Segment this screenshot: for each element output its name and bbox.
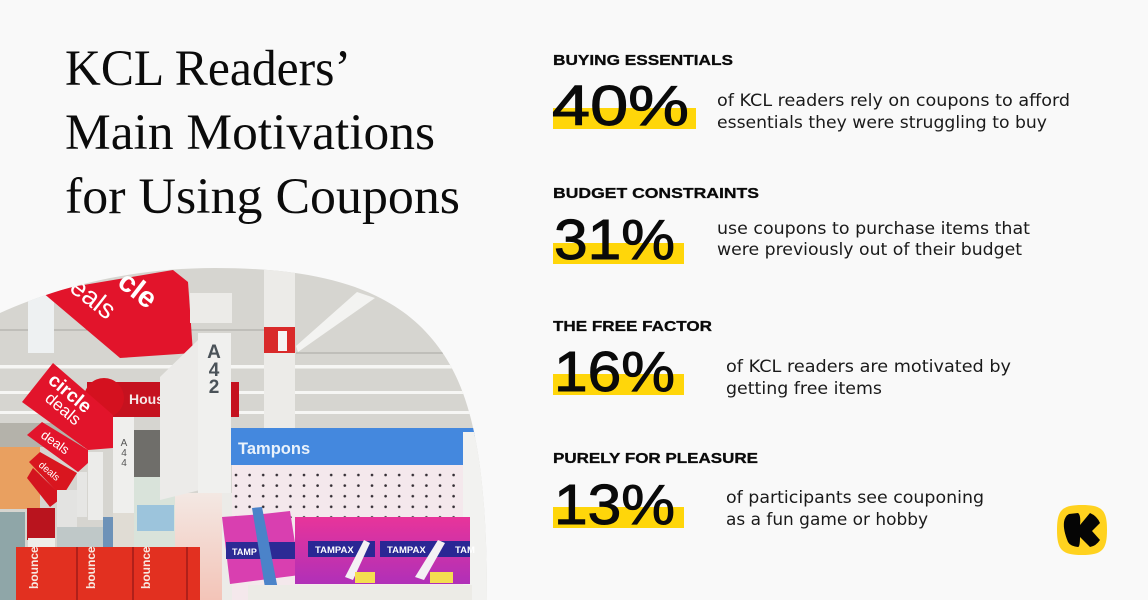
stat: buying essentials (552, 52, 1070, 138)
aisle markers: A (121, 438, 128, 449)
highlight bar (553, 108, 696, 129)
bounce boxes: bounce (84, 546, 98, 589)
number: 40% (552, 74, 689, 138)
icon: K logo (1057, 505, 1107, 555)
stat: budget constraints (553, 185, 1031, 272)
stacked diagonal deals signs (22, 363, 113, 507)
A42 sign: 4 (209, 360, 220, 381)
A42 sign: 2 (209, 377, 219, 398)
stacked diagonal deals signs: deals (38, 427, 73, 458)
stacked diagonal deals signs: deals (36, 460, 61, 484)
number: 16% (554, 340, 675, 404)
ceiling lights and tiles (0, 292, 490, 477)
detergent shelf (0, 477, 175, 600)
red banner: housewares (84, 378, 239, 418)
highlight bar (553, 374, 684, 395)
red hanging sign: circle deals: cle (112, 265, 163, 315)
highlight bar (553, 243, 684, 264)
stat: buying essentials: essentials they were struggling to buy (717, 113, 1047, 132)
heading: BUYING ESSENTIALS (553, 52, 733, 69)
A42 sign: A (207, 342, 221, 363)
pegboard wall (232, 465, 472, 600)
title: for Using Coupons (65, 169, 460, 225)
tampons blue header (231, 428, 489, 600)
description: use coupons to purchase items that (717, 219, 1031, 238)
number: 31% (554, 208, 675, 272)
highlight bar (553, 507, 684, 528)
red hanging sign: circle deals: eals (64, 271, 122, 325)
slat wall (175, 493, 222, 600)
white column with fire sign (264, 270, 295, 428)
heading: THE FREE FACTOR (553, 318, 712, 335)
aisle markers: 4 (121, 458, 127, 469)
title: KCL Readers’ (65, 41, 351, 97)
tampax boxes (222, 507, 475, 600)
description: of KCL readers rely on coupons to afford (717, 91, 1070, 110)
tampax boxes: TAM (455, 545, 475, 556)
heading: PURELY FOR PLEASURE (553, 450, 758, 467)
stat: budget constraints: were previously out of their budget (717, 240, 1023, 259)
number: 13% (554, 473, 675, 537)
aisle markers: 4 (121, 448, 127, 459)
bounce boxes (16, 546, 200, 600)
A42 sign (160, 293, 232, 600)
bounce boxes: bounce (27, 546, 41, 589)
description: of participants see couponing (726, 488, 984, 507)
stat: the free factor (553, 318, 1011, 404)
photo: store aisle in arch shape (0, 260, 490, 600)
bounce boxes: bounce (139, 546, 153, 589)
stacked diagonal deals signs: deals (41, 389, 85, 429)
stacked diagonal deals signs: circle (44, 370, 95, 418)
tampax boxes: TAMPAX (387, 545, 426, 556)
tampax boxes: TAMPAX (315, 545, 354, 556)
title: Main Motivations (65, 105, 435, 161)
description: of KCL readers are motivated by (726, 357, 1011, 376)
aisle markers (57, 417, 134, 547)
heading: BUDGET CONSTRAINTS (553, 185, 759, 202)
red banner: housewares: Hous (129, 391, 164, 407)
title (65, 41, 460, 225)
stat: the free factor: getting free items (726, 379, 882, 398)
tampons blue header: Tampons (238, 440, 310, 458)
stat: purely for pleasure (553, 450, 984, 537)
tampax boxes: TAMP (232, 547, 257, 557)
food poster (0, 447, 40, 509)
stat: purely for pleasure: as a fun game or hobby (726, 510, 928, 529)
red hanging sign: circle deals (42, 265, 193, 358)
